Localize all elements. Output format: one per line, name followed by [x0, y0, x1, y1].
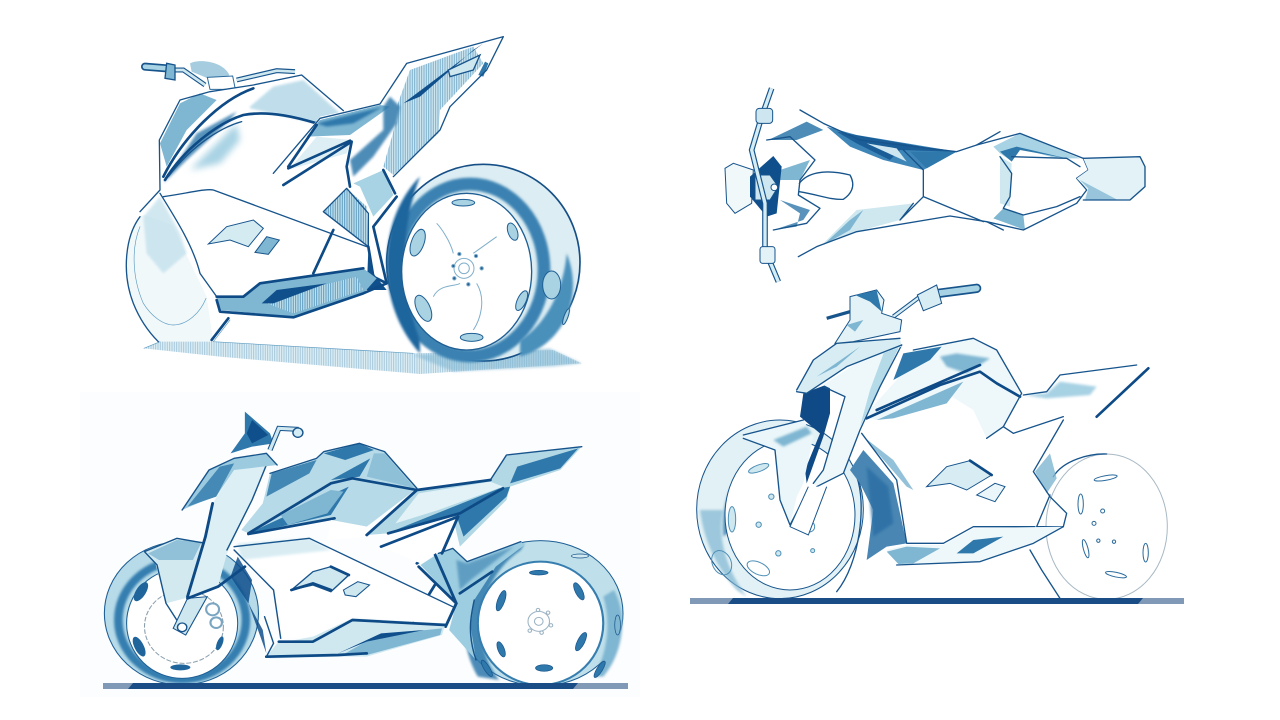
- handlebars: [145, 61, 295, 89]
- headlight cowl and windscreen: [182, 412, 277, 510]
- seat and tail: [1003, 365, 1148, 433]
- sketch: right side three-quarter front view motorcycle: [697, 285, 1167, 599]
- front fender: [743, 420, 813, 525]
- mirror and grip: [270, 428, 303, 450]
- swingarm: [413, 542, 524, 660]
- rear wheel: [1046, 454, 1167, 599]
- fuel tank: [241, 443, 417, 540]
- handlebar: [752, 88, 778, 282]
- belly pan: [212, 268, 387, 340]
- dark fork shadow: [800, 377, 848, 483]
- sketch: left side view motorcycle: [104, 412, 623, 686]
- main body: [862, 420, 1067, 543]
- rear wheel: [387, 164, 580, 361]
- ground bar: right: [690, 598, 1184, 604]
- wheel slots: [407, 199, 571, 341]
- brake details: [130, 580, 225, 670]
- main body and tank: [140, 75, 377, 317]
- hub: [528, 608, 553, 634]
- faint backdrop panel behind lower-left sketch: [80, 392, 640, 697]
- wheel details: [708, 462, 815, 579]
- front fork: [173, 465, 266, 635]
- main body: [231, 538, 453, 653]
- rear wheel: [458, 541, 623, 686]
- ground bar: lower-left: [103, 683, 628, 689]
- front fender and brake: [145, 538, 205, 620]
- upper cowl: [797, 338, 902, 393]
- seat and tail: [367, 447, 582, 563]
- ground shadow: [144, 320, 582, 374]
- headlight: [725, 163, 753, 213]
- wheel slots: [479, 554, 620, 679]
- sketch: top view motorcycle: [725, 88, 1145, 282]
- hub: [433, 223, 497, 330]
- front wheel: [104, 542, 258, 685]
- engine dark core: [850, 450, 907, 560]
- instrument and handlebars: [827, 285, 977, 343]
- seat and tail unit: [273, 37, 503, 187]
- cockpit: [750, 156, 782, 217]
- fuel tank: [863, 338, 1022, 438]
- belly pan: [265, 617, 446, 658]
- body outline: [767, 110, 1088, 257]
- front wheel: [126, 207, 213, 342]
- front wheel: [697, 420, 863, 599]
- sketch: three-quarter rear view motorcycle: [126, 37, 582, 374]
- tail section: [1077, 157, 1145, 201]
- swingarm: [313, 170, 397, 290]
- side vents: [208, 220, 279, 254]
- belly pan: [887, 527, 1063, 598]
- fork panel: [790, 343, 902, 535]
